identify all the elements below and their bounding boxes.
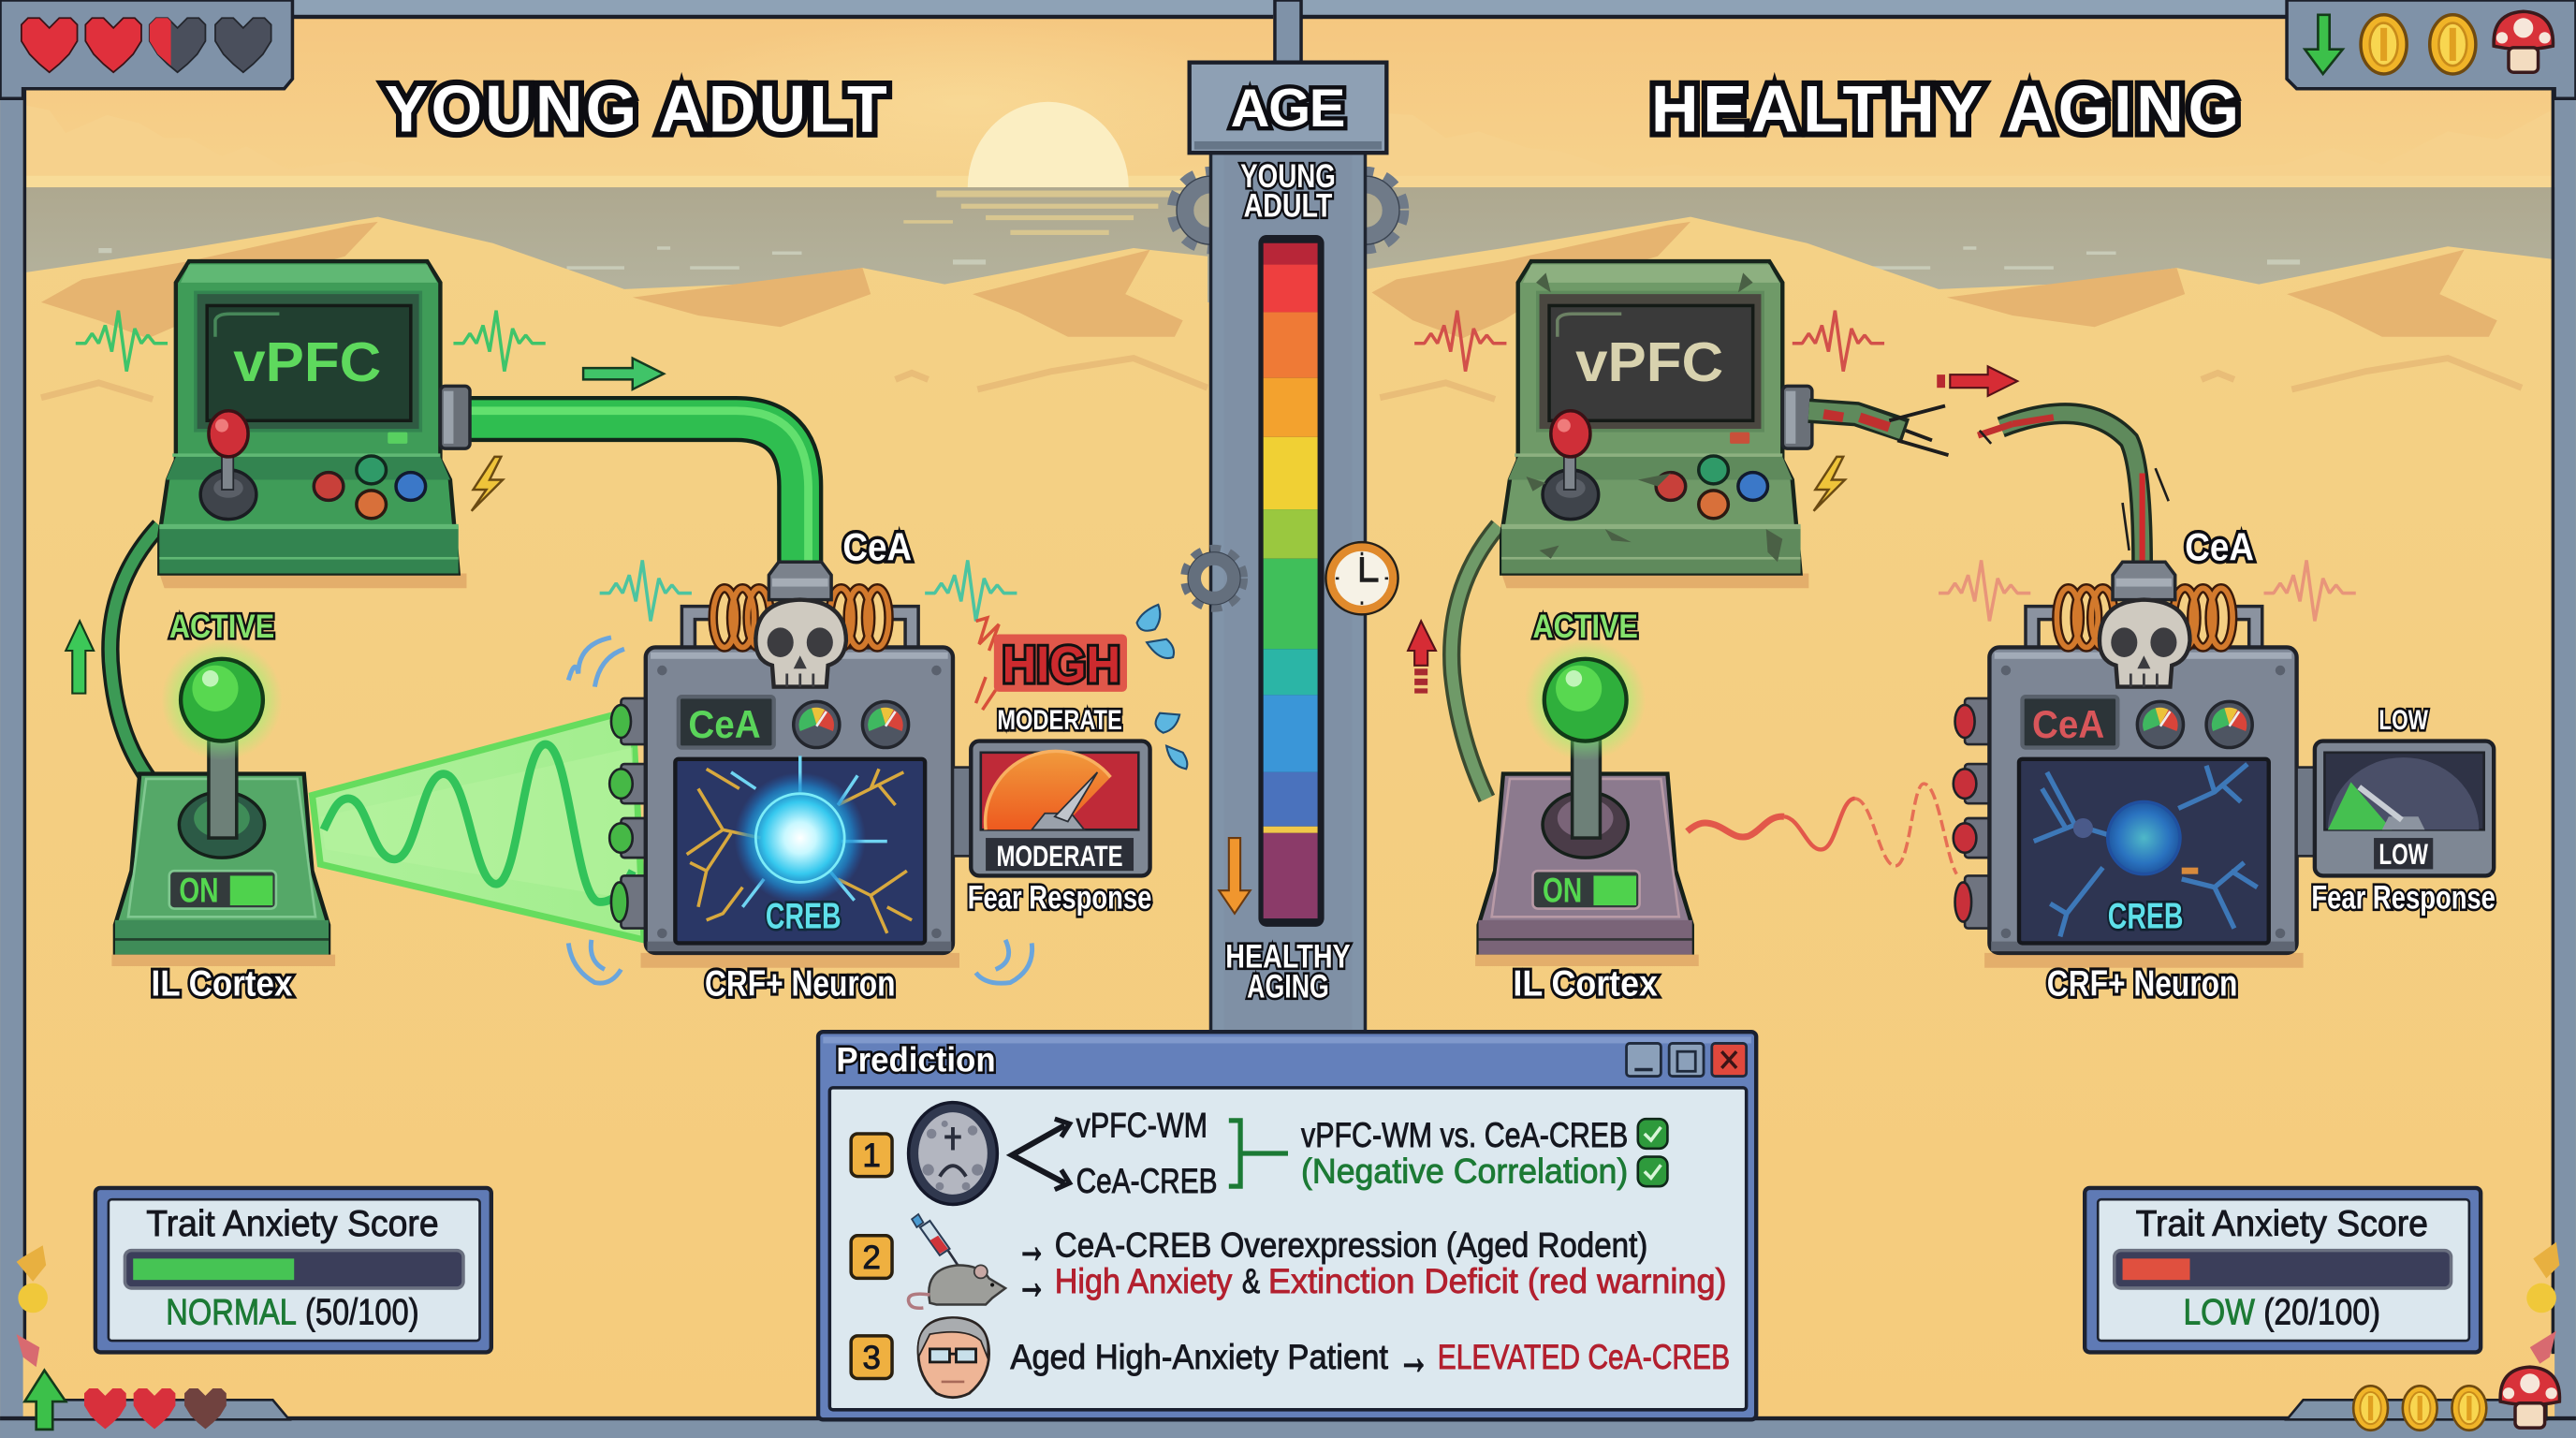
title: Healthy Aging: HEALTHY AGING xyxy=(1651,71,2239,145)
arcade: vPFC xyxy=(159,261,470,588)
arcade: vPFC: vPFC xyxy=(233,330,381,393)
panel: trait anxiety score young xyxy=(95,1188,491,1352)
neuron burst xyxy=(687,756,912,933)
cable: IL to vPFC xyxy=(110,526,159,782)
axis label: young adult: YOUNG xyxy=(1240,158,1336,195)
HUD top-right: arrow, coins and mushroom xyxy=(2287,0,2576,98)
text: high anxiety warning: & xyxy=(1242,1262,1260,1300)
text: high anxiety warning: → xyxy=(1017,1254,1046,1309)
label: IL cortex: IL Cortex xyxy=(152,964,293,1005)
bracket xyxy=(1229,1121,1288,1186)
heartbeat traces red xyxy=(1414,311,2356,621)
title: Young Adult: YOUNG ADULT xyxy=(385,71,887,145)
broken pipe right xyxy=(1978,414,2169,566)
labels: biomarkers xyxy=(1076,1106,1218,1200)
icon: syringe xyxy=(912,1214,958,1265)
joystick: IL cortex dim: ON xyxy=(1543,872,1582,910)
arrow: up red xyxy=(1408,621,1436,694)
age plaque xyxy=(1190,63,1386,153)
label: moderate top: MODERATE xyxy=(997,705,1122,736)
arcade: damaged vPFC: vPFC xyxy=(1575,330,1723,393)
joystick: IL cortex dim xyxy=(1475,639,1699,966)
HUD bottom-right: coins and mushroom xyxy=(2287,1242,2559,1431)
text: overexpression: CeA-CREB Overexpression (Aged Rodent) xyxy=(1055,1226,1647,1265)
gauge: low fear: LOW xyxy=(2378,837,2428,871)
score value: NORMAL (50/100) xyxy=(166,1293,419,1333)
age plaque: AGE xyxy=(1231,79,1345,139)
arrow: right red broken xyxy=(1937,366,2017,396)
cable: IL to vPFC faded xyxy=(1452,526,1499,799)
rainbow age gauge xyxy=(1258,235,1325,927)
label: CeA screen: CeA xyxy=(688,702,761,746)
broken pipe left xyxy=(1808,405,1949,455)
text: high anxiety warning xyxy=(1017,1254,1727,1309)
green signal beam xyxy=(313,710,644,940)
HUD bottom-left: arrow and hearts xyxy=(17,1245,289,1430)
pipe: vPFC to CeA xyxy=(466,411,809,568)
panel: prediction window xyxy=(818,1032,1756,1419)
arcade: damaged vPFC xyxy=(1501,261,1812,588)
text: patient: → xyxy=(1398,1329,1429,1385)
icon: mouse xyxy=(908,1265,1005,1308)
label: CREB: CREB xyxy=(2108,897,2183,937)
joystick: IL cortex: ON xyxy=(179,872,218,910)
row 2 xyxy=(851,1214,1727,1309)
labels: biomarkers: vPFC-WM xyxy=(1076,1106,1208,1144)
text: overexpression xyxy=(1017,1218,1647,1273)
arrow: age direction down xyxy=(1219,838,1251,914)
label: fear response: Fear Response xyxy=(968,880,1151,917)
label: low top: LOW xyxy=(2378,705,2429,736)
score bar xyxy=(124,1251,463,1288)
heading: Trait Anxiety Score xyxy=(2136,1204,2428,1244)
window title: Prediction xyxy=(836,1040,996,1078)
text: high anxiety warning: High Anxiety xyxy=(1055,1262,1233,1300)
icon: clock xyxy=(1325,542,1398,614)
icon: brain scan xyxy=(909,1103,997,1204)
panel: trait anxiety score aging xyxy=(2085,1188,2481,1352)
label: IL cortex: IL Cortex xyxy=(1513,964,1658,1005)
neuron dim xyxy=(2034,764,2257,936)
number badge 3: 3 xyxy=(862,1340,881,1376)
label: CRF+ neuron: CRF+ Neuron xyxy=(705,964,896,1005)
gauge: moderate fear xyxy=(971,741,1150,875)
arrow: right green xyxy=(583,359,664,389)
text: high anxiety warning: Extinction Deficit (red warning) xyxy=(1268,1262,1727,1300)
label: CeA screen: CeA xyxy=(2032,702,2104,746)
text: patient xyxy=(1010,1329,1429,1385)
number badge 1 xyxy=(851,1134,892,1177)
text: elevated: ELEVATED CeA-CREB xyxy=(1438,1338,1730,1376)
device: CeA CRF neuron dim xyxy=(1954,562,2315,968)
label: CREB: CREB xyxy=(766,897,842,937)
text: patient: Aged High-Anxiety Patient xyxy=(1010,1338,1388,1376)
correlation text: (Negative Correlation) xyxy=(1301,1152,1628,1191)
panel: healthy aging circuit xyxy=(1408,261,2496,1005)
score value: LOW (20/100) xyxy=(2183,1293,2380,1333)
axis label: healthy aging xyxy=(1225,939,1351,1005)
label: fear response: Fear Response xyxy=(2311,880,2496,917)
number badge 2 xyxy=(851,1236,892,1278)
icon: bolt xyxy=(1814,457,1845,511)
arrows: split xyxy=(1012,1119,1070,1190)
label: active: ACTIVE xyxy=(1532,609,1638,645)
correlation text xyxy=(1301,1116,1628,1191)
steam and sweat effects xyxy=(568,605,1187,983)
axis label: healthy aging: AGING xyxy=(1247,968,1329,1005)
number badge 2: 2 xyxy=(862,1240,881,1276)
HUD top-left: lives hearts xyxy=(0,0,292,98)
axis label: young adult xyxy=(1240,158,1336,225)
age column with gauge xyxy=(1175,63,1401,1035)
label: CRF+ neuron: CRF+ Neuron xyxy=(2047,964,2237,1005)
text: overexpression: → xyxy=(1017,1218,1046,1273)
label: CeA: CeA xyxy=(2185,524,2254,568)
gauge: low fear xyxy=(2315,741,2494,875)
weak red signal xyxy=(1687,784,1956,874)
labels: biomarkers: CeA-CREB xyxy=(1076,1162,1218,1200)
window buttons xyxy=(1627,1043,1747,1077)
axis label: young adult: ADULT xyxy=(1244,188,1333,225)
gauge: moderate fear: MODERATE xyxy=(996,839,1123,873)
arrow: up green xyxy=(66,621,94,694)
number badge 3 xyxy=(851,1336,892,1378)
icon: gear on column xyxy=(1186,550,1242,607)
panel: young adult circuit xyxy=(66,261,1187,1005)
label: CeA: CeA xyxy=(842,524,912,568)
badge: HIGH: HIGH xyxy=(1003,636,1120,693)
axis label: healthy aging: HEALTHY xyxy=(1225,939,1351,976)
row 3 xyxy=(851,1318,1730,1398)
icon: aged patient xyxy=(918,1318,989,1398)
number badge 1: 1 xyxy=(862,1137,881,1174)
score bar xyxy=(2115,1251,2452,1288)
heartbeat traces xyxy=(76,311,1017,621)
correlation text: vPFC-WM vs. CeA-CREB xyxy=(1301,1116,1628,1154)
heading: Trait Anxiety Score xyxy=(146,1204,439,1244)
joystick: IL cortex xyxy=(111,639,335,966)
icons: checks xyxy=(1638,1119,1667,1186)
device: CeA CRF neuron xyxy=(609,562,971,968)
label: active: ACTIVE xyxy=(169,609,274,645)
row 1 xyxy=(851,1103,1667,1204)
icon: bolt xyxy=(472,457,503,511)
